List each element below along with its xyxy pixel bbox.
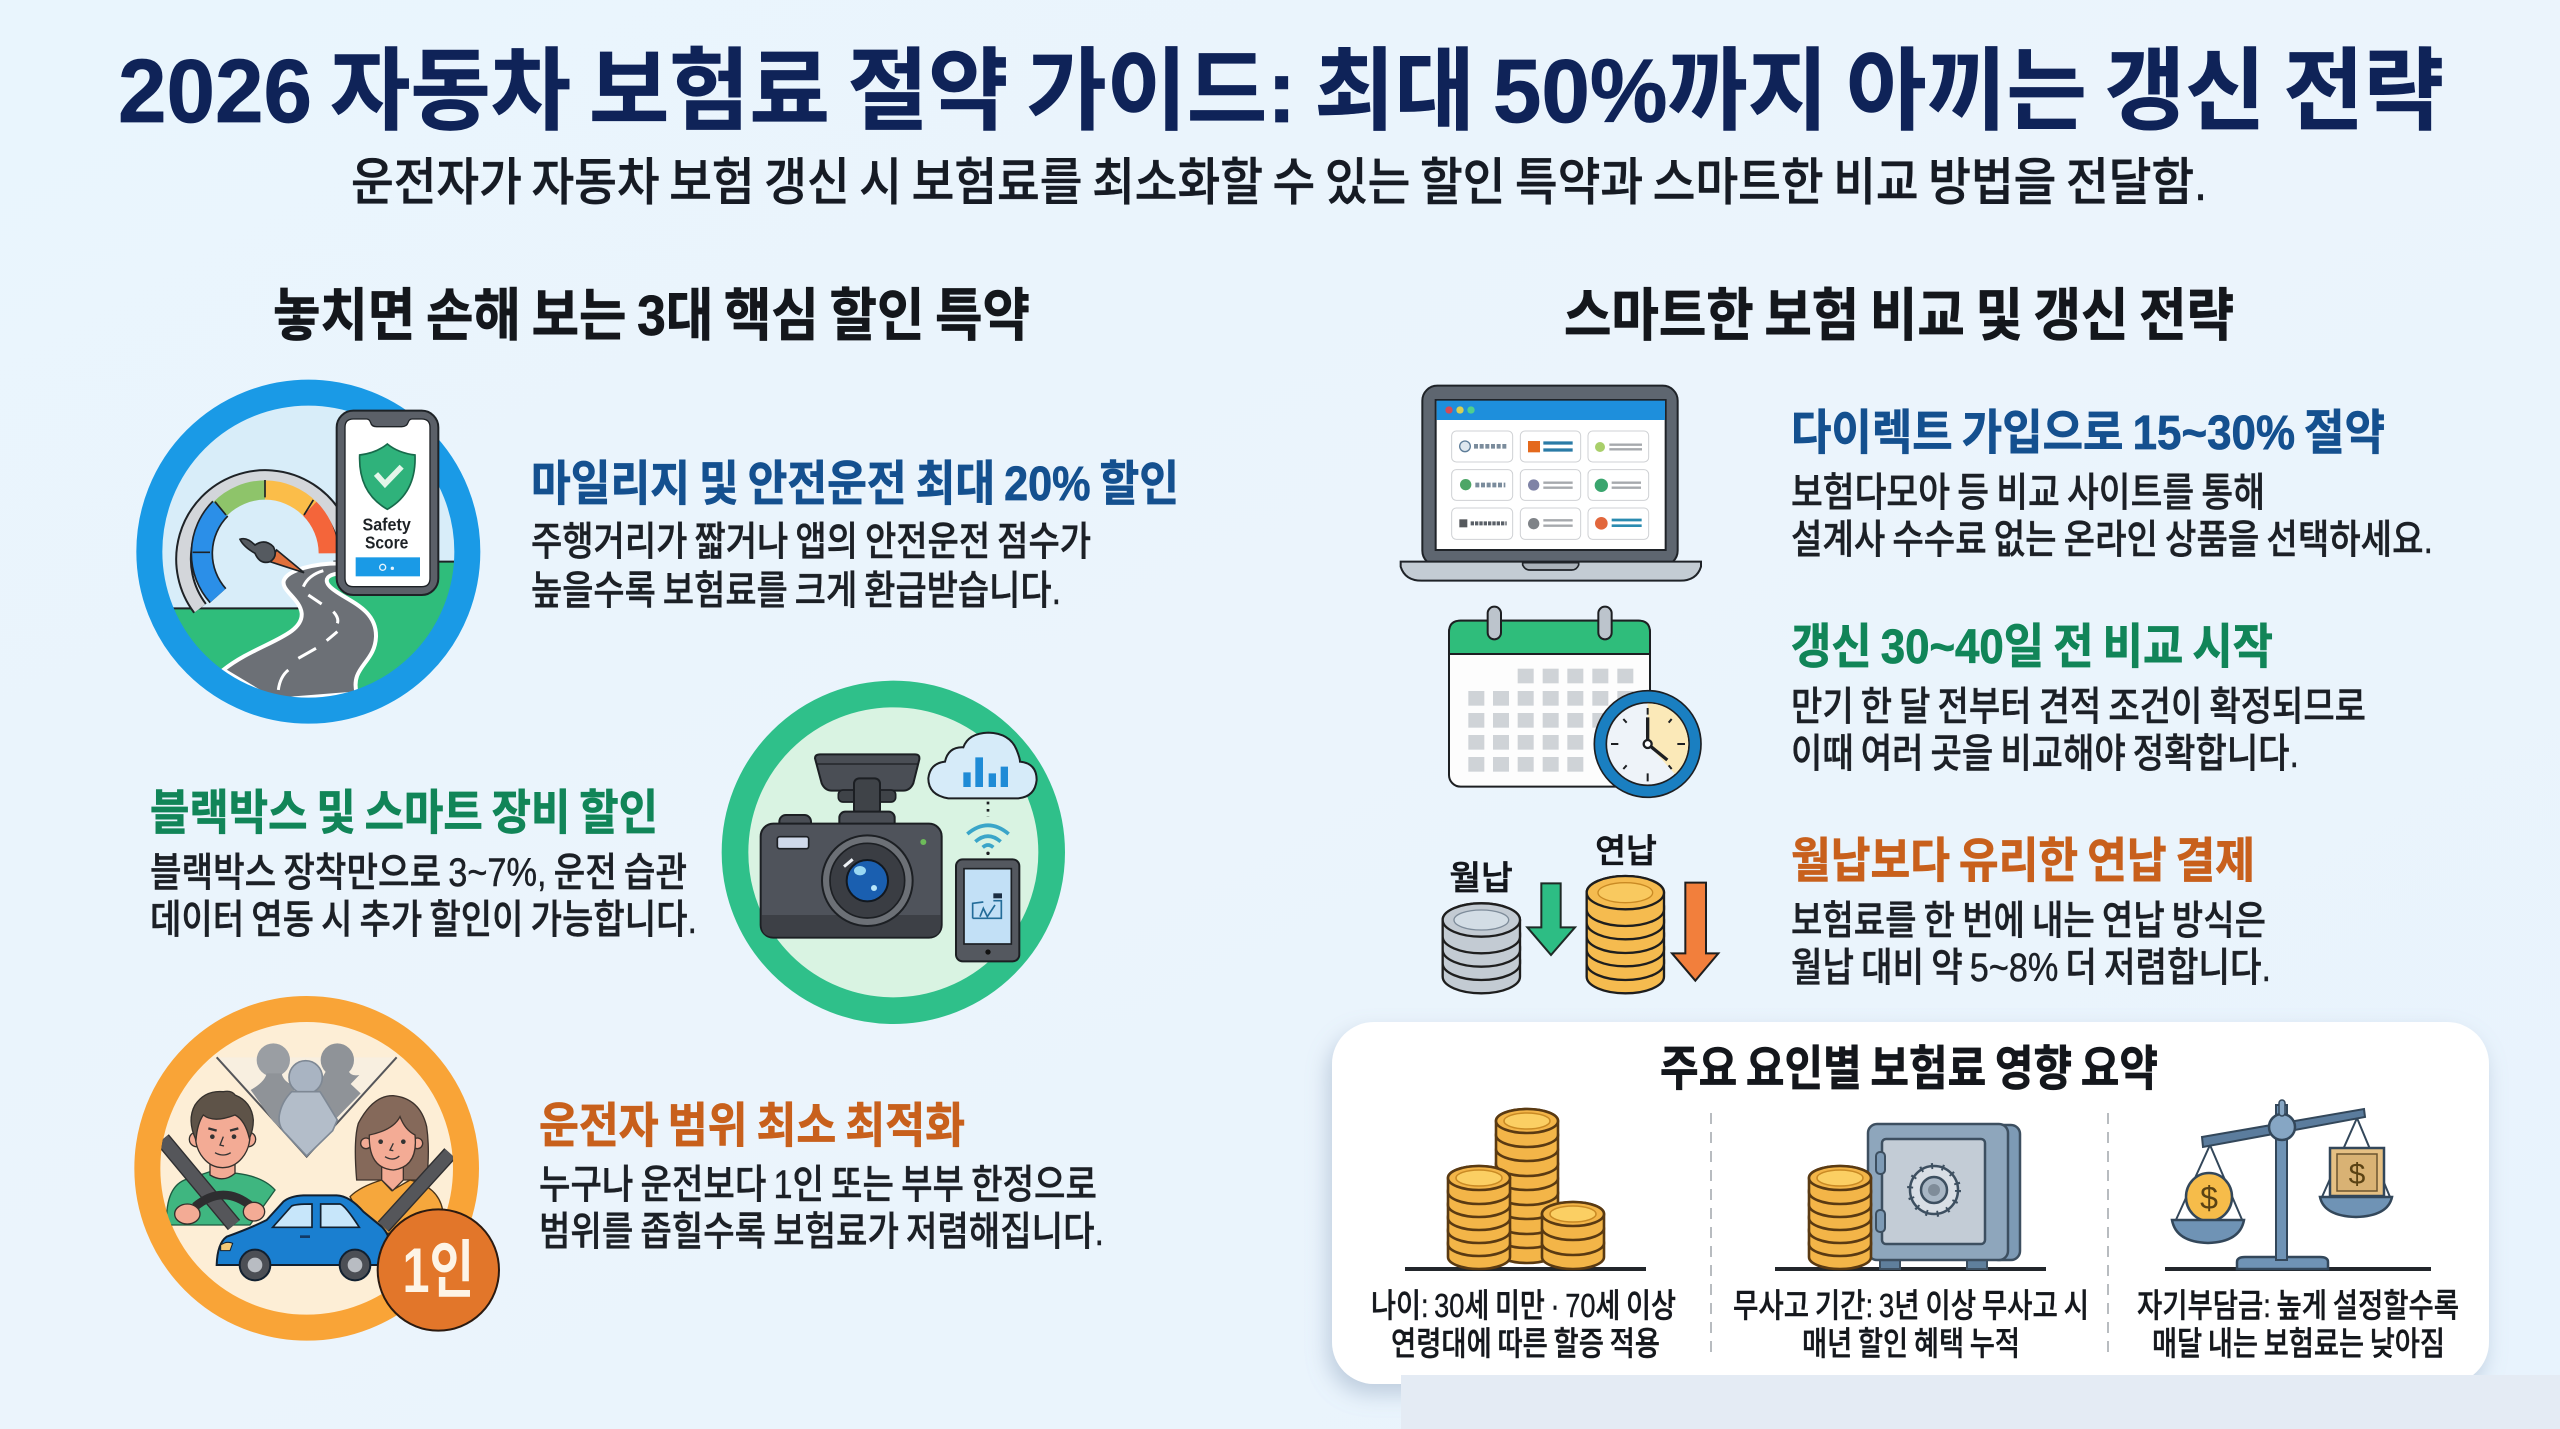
bottom right blank patch [1401,1375,2560,1429]
feature 5: compare before renewal: 이때 여러 곳을 비교해야 정확합니다. [1791,732,2299,776]
feature 2: black box discount [150,787,697,942]
panel background [1332,1022,2489,1384]
icon: speedometer, road and safety score phone [149,393,467,717]
feature 3: driver range: 범위를 좁힐수록 보험료가 저렴해집니다. [539,1210,1104,1254]
icon: monthly versus annual payment: 월납 [1449,860,1513,897]
factor text: age: 연령대에 따른 할증 적용 [1391,1325,1660,1362]
factor text: no accident period [1733,1287,2089,1362]
icon: speedometer, road and safety score phone: Safety [362,514,411,534]
factor text: deductible: 매달 내는 보험료는 낮아짐 [2152,1325,2445,1362]
icon: driver range with man, woman, car and 1-person badge [147,1009,499,1331]
icon: balance scale [2165,1100,2431,1269]
factor text: deductible [2137,1287,2459,1362]
feature 3: driver range: 누구나 운전보다 1인 또는 부부 한정으로 [539,1163,1097,1207]
feature 6: annual payment: 월납보다 유리한 연납 결제 [1791,835,2255,888]
icon: driver range with man, woman, car and 1-person badge: 1인 [402,1236,474,1306]
heading: right section: 스마트한 보험 비교 및 갱신 전략 [1564,284,2234,348]
icon: speedometer, road and safety score phone: Score [365,532,409,552]
factor text: age: 나이: 30세 미만 · 70세 이상 [1371,1287,1676,1324]
panel heading: 주요 요인별 보험료 영향 요약 [1660,1043,2158,1096]
feature 3: driver range [539,1100,1104,1254]
factor text: deductible: 자기부담금: 높게 설정할수록 [2137,1287,2459,1324]
factor text: no accident period: 무사고 기간: 3년 이상 무사고 시 [1733,1287,2089,1324]
feature 4: direct signup [1791,407,2433,562]
feature 5: compare before renewal: 갱신 30~40일 전 비교 시작 [1791,621,2273,674]
icon: laptop comparison site [1401,386,1701,581]
icon: calendar and clock [1449,607,1701,797]
feature 1: mileage discount: 높을수록 보험료를 크게 환급받습니다. [531,569,1061,613]
feature 6: annual payment [1791,835,2271,990]
factor text: no accident period: 매년 할인 혜택 누적 [1802,1325,2020,1362]
feature 5: compare before renewal [1791,621,2366,776]
feature 4: direct signup: 보험다모아 등 비교 사이트를 통해 [1791,471,2265,515]
feature 6: annual payment: 월납 대비 약 5~8% 더 저렴합니다. [1791,946,2271,990]
feature 5: compare before renewal: 만기 한 달 전부터 견적 조건이 확정되므로 [1791,685,2366,729]
feature 1: mileage discount: 주행거리가 짧거나 앱의 안전운전 점수가 [531,520,1091,564]
feature 4: direct signup: 다이렉트 가입으로 15~30% 절약 [1791,407,2385,460]
heading: left section: 놓치면 손해 보는 3대 핵심 할인 특약 [273,284,1030,348]
feature 2: black box discount: 블랙박스 및 스마트 장비 할인 [150,787,658,840]
feature 1: mileage discount: 마일리지 및 안전운전 최대 20% 할인 [531,458,1179,511]
feature 2: black box discount: 블랙박스 장착만으로 3~7%, 운전 습관 [150,851,687,895]
feature 3: driver range: 운전자 범위 최소 최적화 [539,1100,965,1153]
feature 2: black box discount: 데이터 연동 시 추가 할인이 가능합니다. [150,898,697,942]
icon: safe with coins [1775,1124,2046,1269]
feature 1: mileage discount [531,458,1179,613]
feature 4: direct signup: 설계사 수수료 없는 온라인 상품을 선택하세요. [1791,518,2433,562]
factor text: age [1371,1287,1676,1362]
icon: dash cam with cloud and phone [735,694,1052,1011]
icon: monthly versus annual payment [1443,834,1718,993]
icon: coin stacks [1405,1109,1646,1269]
icon: monthly versus annual payment: 연납 [1595,834,1657,871]
subtitle: 운전자가 자동차 보험 갱신 시 보험료를 최소화할 수 있는 할인 특약과 스마트한 비교 방법을 전달함. [351,154,2207,211]
icon: balance scale: $ [2200,1180,2218,1216]
panel: premium factor summary [1332,1022,2489,1384]
title: 2026 자동차 보험료 절약 가이드: 최대 50%까지 아끼는 갱신 전략 [118,42,2444,142]
feature 6: annual payment: 보험료를 한 번에 내는 연납 방식은 [1791,899,2266,943]
icon: balance scale: $ [2349,1158,2366,1191]
